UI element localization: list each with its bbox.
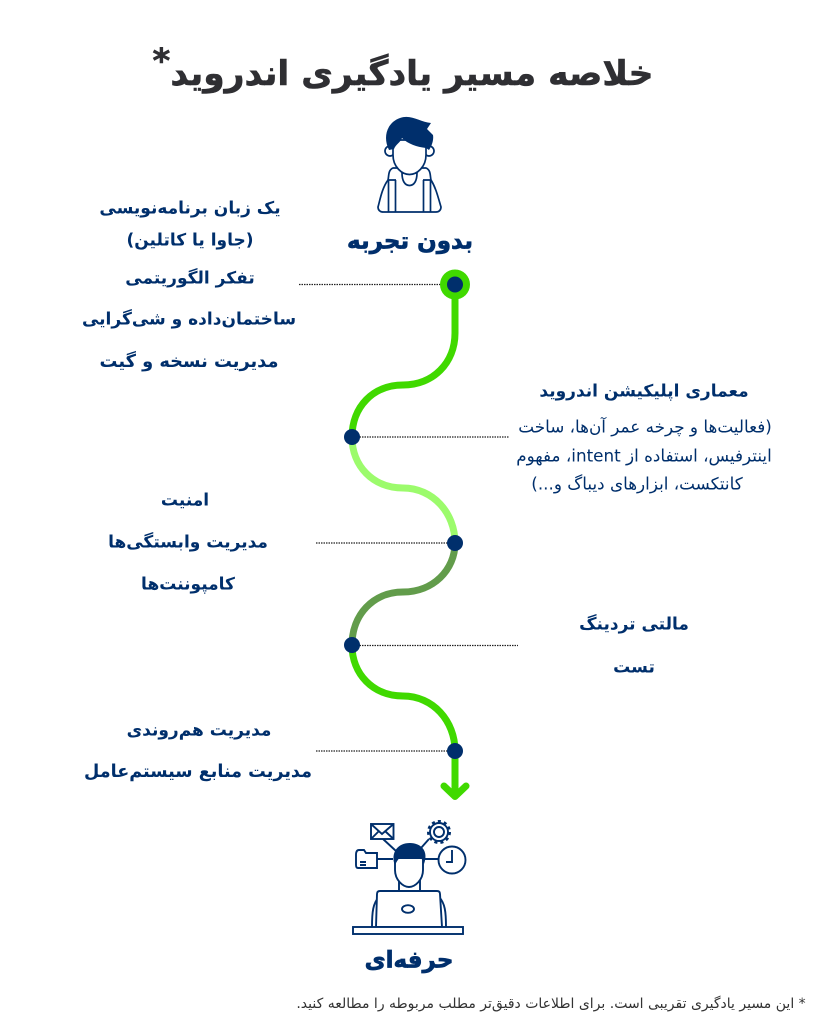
dotted leader lines xyxy=(299,284,518,751)
item: concurrency: مدیریت هم‌روندی xyxy=(127,720,271,740)
text block: fundamentals xyxy=(82,198,296,372)
item: multithreading: مالتی تردینگ xyxy=(579,614,689,634)
icon: beginner student xyxy=(378,117,441,212)
title: خلاصه مسیر یادگیری اندروید* xyxy=(153,41,653,94)
text block: multitrading and test xyxy=(579,614,689,678)
item: test: تست xyxy=(613,658,655,678)
line two: اینترفیس، استفاده از intent، مفهوم xyxy=(516,446,772,466)
item: security: امنیت xyxy=(161,490,209,510)
segment: bright green two with arrow xyxy=(352,645,466,796)
text block: concurrency and OS xyxy=(84,720,312,782)
footnote: * این مسیر یادگیری تقریبی است. برای اطلاعات دقیق‌تر مطلب مربوطه را مطالعه کنید. xyxy=(296,996,806,1012)
item: data structures and OOP: ساختمان‌داده و شی‌گرایی xyxy=(82,310,296,330)
line three: کانتکست، ابزارهای دیباگ و...) xyxy=(531,474,743,494)
item: dependency management: مدیریت وابستگی‌ها xyxy=(108,532,268,552)
start ring xyxy=(440,270,470,300)
text block: android architecture xyxy=(516,382,772,494)
item: OS resources: مدیریت منابع سیستم‌عامل xyxy=(84,762,312,782)
label: no experience: بدون تجربه xyxy=(347,228,473,254)
item: java or kotlin: (جاوا یا کاتلین) xyxy=(126,230,254,250)
icon: professional at laptop xyxy=(353,822,466,934)
segment: light green xyxy=(352,437,455,543)
label: professional: حرفه‌ای xyxy=(365,948,453,974)
segment: bright green one xyxy=(352,284,455,437)
item: algorithmic thinking: تفکر الگوریتمی xyxy=(125,268,255,288)
item: components: کامپوننت‌ها xyxy=(141,574,235,594)
line one: (فعالیت‌ها و چرخه عمر آن‌ها، ساخت xyxy=(518,417,772,437)
item: programming language: یک زبان برنامه‌نویسی xyxy=(99,198,281,218)
node markers xyxy=(344,276,463,759)
heading: android app architecture: معماری اپلیکیشن اندروید xyxy=(539,382,749,402)
segment: muted green xyxy=(352,543,455,645)
text block: security and dependencies xyxy=(108,490,268,594)
item: version control: مدیریت نسخه و گیت xyxy=(100,351,278,372)
